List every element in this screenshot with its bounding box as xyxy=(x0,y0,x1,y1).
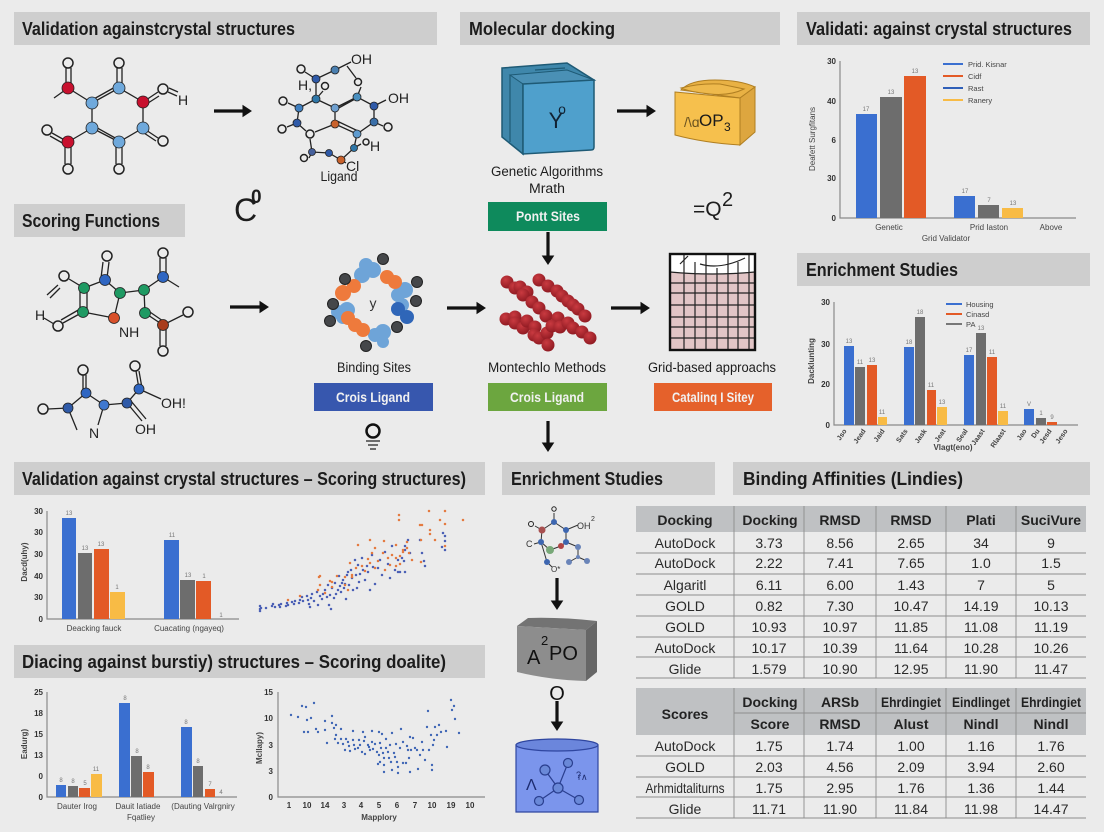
heading: validation scoring structures: Validation against crystal structures – Scoring structures) xyxy=(22,469,466,489)
chart: enrichment bar chart: Cinasd xyxy=(966,310,989,319)
table body rows: 11.08 xyxy=(964,619,998,635)
icon: binding site ring xyxy=(324,254,422,352)
label: genetic algorithms: Genetic Algorithms xyxy=(491,164,603,179)
chart: enrichment bar chart: 11 xyxy=(1000,404,1007,410)
chart: validation bar chart: Cuacating (ngayeq) xyxy=(154,624,224,633)
chart: enrichment bar chart: 9 xyxy=(1050,415,1054,421)
chart: validation bar chart: 30 xyxy=(34,593,44,602)
chart: docking bar chart: 0 xyxy=(39,772,44,781)
icon: molecule hexagon with red atoms xyxy=(42,58,188,174)
scores header: Nindl xyxy=(1034,716,1068,732)
chart: enrichment bar chart: Jao xyxy=(1016,428,1029,442)
button: crois ligand blue xyxy=(314,383,433,411)
heading: docking scoring: Diacing against burstiy) structures – Scoring doalite) xyxy=(22,652,446,672)
scores rows: 1.76 xyxy=(1037,738,1065,754)
chart: enrichment bar chart: Rlaast xyxy=(990,428,1008,449)
scores rows: Arhmidtaliturns xyxy=(646,780,724,796)
table body rows: 7 xyxy=(977,577,985,593)
chart: validation bar chart: 1 xyxy=(219,613,223,619)
table body rows: 1.579 xyxy=(751,661,787,677)
chart: enrichment bar chart: Jso xyxy=(836,428,849,442)
chart: enrichment bar chart: 13 xyxy=(978,326,985,332)
scores rows: 1.76 xyxy=(897,780,925,796)
scores rows: 1.74 xyxy=(826,738,854,754)
heading: binding affinities: Binding Affinities (Lindies) xyxy=(743,469,963,489)
arrow xyxy=(617,109,647,113)
chart: enrichment bar chart: Jesd xyxy=(1039,428,1054,445)
chart: enrichment bar chart: Jeat xyxy=(934,428,948,444)
icon: enrichment molecule: OH xyxy=(577,521,590,531)
chart: enrichment bar chart: 0 xyxy=(826,421,831,430)
label: montechlo methods: Montechlo Methods xyxy=(488,360,606,375)
icon: grey box xyxy=(517,618,597,681)
chart: enrichment bar chart: PA xyxy=(966,320,975,329)
table body rows: 6.11 xyxy=(756,577,782,593)
chart: enrichment bar chart: Jaid xyxy=(873,428,887,444)
arrow xyxy=(447,306,477,310)
chart: scatter mapping: Mcllapy) xyxy=(255,732,264,764)
icon: scoring molecule blue: OH! xyxy=(161,395,186,411)
scores rows xyxy=(646,738,1069,817)
chart: scatter mapping: 3 xyxy=(269,767,274,776)
chart: docking bar chart xyxy=(20,688,237,822)
chart: scatter mapping: 0 xyxy=(269,793,274,802)
chart: enrichment bar chart: Jeso xyxy=(1055,428,1070,445)
chart: top right bar chart xyxy=(808,57,1076,243)
chart: validation bar chart: 13 xyxy=(98,542,105,548)
chart: top right bar chart: 13 xyxy=(1010,201,1017,207)
icon: bulb glyph xyxy=(366,424,380,449)
icon: red molecule chains xyxy=(500,274,596,352)
chart: scatter mapping: 14 xyxy=(321,801,330,810)
chart: docking bar chart: 11 xyxy=(93,767,100,773)
scores rows: 1.75 xyxy=(755,780,783,796)
icon: yellow box xyxy=(675,80,755,145)
chart: enrichment bar chart: 11 xyxy=(857,360,864,366)
icon: ligand molecule: OH xyxy=(388,90,409,106)
chart: docking bar chart: 7 xyxy=(208,782,212,788)
table body rows: 10.97 xyxy=(822,619,858,635)
chart: validation bar chart: Deacking fauck xyxy=(67,624,122,633)
table body rows: 1.0 xyxy=(971,555,991,571)
chart: scatter mapping: Mapplory xyxy=(361,813,397,822)
arrow xyxy=(555,701,559,722)
scores rows: 1.00 xyxy=(897,738,925,754)
icon: enrichment molecule: O* xyxy=(551,565,560,574)
heading: molecular docking: Molecular docking xyxy=(469,19,615,39)
chart: scatter mapping: 3 xyxy=(269,741,274,750)
heading: enrichment studies center: Enrichment Studies xyxy=(511,469,663,489)
icon: ligand molecule: Cl xyxy=(346,158,359,174)
chart: scatter mapping: 7 xyxy=(413,801,418,810)
chart: docking bar chart: Eadurg) xyxy=(20,729,29,759)
chart: docking bar chart: 5 xyxy=(83,781,87,787)
table body rows: 9 xyxy=(1047,535,1055,551)
chart: enrichment bar chart: 13 xyxy=(939,400,946,406)
chart: top right bar chart: Prid Iaston xyxy=(970,223,1008,232)
table body rows: 7.30 xyxy=(826,598,854,614)
chart: scatter mapping xyxy=(255,688,485,822)
button: crois ligand green: Crois Ligand xyxy=(510,390,584,405)
table body rows: 10.26 xyxy=(1033,640,1069,656)
chart: enrichment bar chart: Housing xyxy=(966,300,994,309)
chart: docking bar chart: 8 xyxy=(146,765,150,771)
scores rows: 11.84 xyxy=(894,801,928,817)
chart: enrichment bar chart: 11 xyxy=(989,350,996,356)
chart: docking bar chart: 0 xyxy=(39,793,44,802)
chart: validation bar chart: 30 xyxy=(34,528,44,537)
chart: validation bar chart: 40 xyxy=(34,572,44,581)
chart: top right bar chart: 40 xyxy=(827,97,837,106)
chart: docking bar chart: (Dauting Valrgniry xyxy=(171,802,235,811)
chart: top right bar chart: Grid Validator xyxy=(922,234,970,243)
chart: enrichment bar chart: 1 xyxy=(1039,411,1043,417)
table: docking values xyxy=(636,506,1086,678)
arrow xyxy=(546,232,550,256)
icon: yellow box: OP xyxy=(699,111,724,130)
scores rows: Glide xyxy=(669,801,702,817)
icon: yellow box: /\ɑ' xyxy=(684,114,702,130)
chart: top right bar chart: Above xyxy=(1040,223,1063,232)
scores header xyxy=(662,694,1081,732)
scores rows: 11.71 xyxy=(752,801,786,817)
chart: docking bar chart: 15 xyxy=(34,730,44,739)
button: crois ligand green xyxy=(488,383,607,411)
chart: scatter mapping: 5 xyxy=(377,801,382,810)
table body rows: AutoDock xyxy=(655,555,716,571)
table body rows: GOLD xyxy=(665,619,705,635)
icon: molecule hexagon with red atoms: H xyxy=(178,92,188,108)
chart: scatter blue and orange xyxy=(260,511,463,611)
chart: enrichment bar chart: 13 xyxy=(869,358,876,364)
chart: validation bar chart: 30 xyxy=(34,507,44,516)
chart: enrichment bar chart: 13 xyxy=(846,339,853,345)
chart: top right bar chart: Prid. Kisnar xyxy=(968,60,1007,69)
chart: enrichment bar chart: Du xyxy=(1031,428,1042,440)
chart: enrichment bar chart: Sats xyxy=(895,428,910,444)
scores rows: AutoDock xyxy=(655,738,716,754)
chart: enrichment bar chart: 11 xyxy=(879,410,886,416)
chart: top right bar chart: 30 xyxy=(827,57,837,66)
table body rows: 10.47 xyxy=(893,598,929,614)
chart: scatter mapping: 10 xyxy=(303,801,312,810)
chart: top right bar chart: 6 xyxy=(832,136,837,145)
chart: enrichment bar chart: 11 xyxy=(928,383,935,389)
chart: docking bar chart: Dauit Iatiade xyxy=(116,802,161,811)
chart: enrichment bar chart: 30 xyxy=(821,340,831,349)
arrow xyxy=(214,109,243,113)
chart: docking bar chart: 18 xyxy=(34,709,44,718)
table body rows: 10.13 xyxy=(1033,598,1069,614)
chart: enrichment bar chart: Jaast xyxy=(971,428,987,447)
scores header: Ehrdingiet xyxy=(1021,694,1081,710)
formula: equals Q squared: 2 xyxy=(722,189,733,211)
heading: validation against crystal structures xyxy=(14,12,437,45)
chart: scatter mapping: 1 xyxy=(287,801,292,810)
chart: top right bar chart: Ranery xyxy=(968,96,992,105)
table body rows: 11.90 xyxy=(964,661,998,677)
heading: scoring functions xyxy=(14,204,185,237)
heading: molecular docking xyxy=(460,12,780,45)
chart: top right bar chart: 0 xyxy=(832,214,837,223)
icon: blue cylinder with molecule xyxy=(516,739,598,812)
table body rows xyxy=(655,535,1069,677)
icon: blue cube: o xyxy=(558,101,566,117)
icon: enrichment molecule: 2 xyxy=(591,516,595,523)
heading: validation scoring structures xyxy=(14,462,485,495)
scores rows: 1.36 xyxy=(967,780,995,796)
chart: enrichment bar chart: V xyxy=(1027,402,1031,408)
icon: ligand molecule: H xyxy=(370,138,380,154)
label: genetic algorithms xyxy=(491,164,603,196)
chart: validation bar chart: Dacd(uhy) xyxy=(20,542,29,582)
heading: scoring functions: Scoring Functions xyxy=(22,211,160,231)
icon: ligand molecule: Ligand xyxy=(320,168,358,184)
arrow xyxy=(546,421,550,443)
icon: blue cube xyxy=(502,63,594,154)
chart: top right bar chart: 13 xyxy=(912,69,919,75)
icon: yellow box: 3 xyxy=(724,120,731,134)
chart: enrichment bar chart: Seal xyxy=(956,428,970,444)
scores rows: 2.60 xyxy=(1037,759,1065,775)
table: scores xyxy=(636,688,1086,818)
label: genetic algorithms: Mrath xyxy=(529,181,565,196)
scores rows: GOLD xyxy=(665,759,705,775)
chart: enrichment bar chart: 30 xyxy=(821,298,831,307)
chart: validation bar chart: 11 xyxy=(169,533,176,539)
table body rows: 5 xyxy=(1047,577,1055,593)
formula: equals Q squared xyxy=(693,189,733,221)
scores rows: 3.94 xyxy=(967,759,995,775)
chart: validation bar chart: 1 xyxy=(115,585,119,591)
chart: docking bar chart: Dauter Irog xyxy=(57,802,97,811)
scores rows: 1.44 xyxy=(1037,780,1065,796)
table header row xyxy=(657,512,1081,528)
heading: validation against crystal structures: Validation againstcrystal structures xyxy=(22,19,295,39)
chart: enrichment bar chart: Dacklunting xyxy=(807,338,816,384)
button: pontt sites xyxy=(488,202,607,231)
table header row: Docking xyxy=(742,512,798,528)
chart: validation bar chart: 13 xyxy=(185,573,192,579)
scores header: Ehrdingiet xyxy=(881,694,941,710)
scores header: RMSD xyxy=(819,716,861,732)
scores rows: 11.98 xyxy=(964,801,998,817)
icon: binding site ring: y xyxy=(370,295,376,311)
chart: top right bar chart: Rast xyxy=(968,84,984,93)
chart: scatter mapping: 3 xyxy=(342,801,347,810)
button: crois ligand blue: Crois Ligand xyxy=(336,390,410,405)
chart: docking bar chart: 4 xyxy=(219,790,223,796)
button: catalinq sitey orange xyxy=(654,383,772,411)
chart: enrichment bar chart: Jask xyxy=(914,428,929,445)
label: binding sites: Binding Sites xyxy=(337,360,411,375)
chart: docking bar chart: Fqatliey xyxy=(127,813,155,822)
table body rows: 6.00 xyxy=(826,577,854,593)
button: pontt sites: Pontt Sites xyxy=(516,209,580,224)
chart: enrichment bar chart: 17 xyxy=(966,348,973,354)
table body rows: 11.47 xyxy=(1034,661,1068,677)
icon: scoring molecule green xyxy=(35,248,193,356)
formula: C superscript 0: 0 xyxy=(251,187,262,208)
heading: binding affinities xyxy=(733,462,1090,495)
table header row: Plati xyxy=(966,512,996,528)
icon: enrichment molecule xyxy=(526,507,595,574)
heading: enrichment studies center xyxy=(502,462,715,495)
table body rows: GOLD xyxy=(665,598,705,614)
chart: docking bar chart: 8 xyxy=(184,720,188,726)
formula: equals Q squared: =Q xyxy=(693,198,722,221)
table header row: RMSD xyxy=(819,512,861,528)
chart: docking bar chart: 8 xyxy=(123,696,127,702)
chart: scatter mapping: 10 xyxy=(466,801,475,810)
chart: validation bar chart: 13 xyxy=(82,546,89,552)
icon: scoring molecule blue: OH xyxy=(135,421,156,437)
chart: enrichment bar chart: 18 xyxy=(906,340,913,346)
icon: grid cylinder xyxy=(670,254,755,350)
table body rows: 3.73 xyxy=(755,535,783,551)
heading: validate against crystal structures xyxy=(797,12,1090,45)
chart: top right bar chart: 13 xyxy=(888,90,895,96)
icon: ligand molecule: H, xyxy=(298,77,312,93)
table header row: RMSD xyxy=(890,512,932,528)
table body rows: 10.39 xyxy=(822,640,858,656)
chart: top right bar chart: 17 xyxy=(962,189,969,195)
icon: ligand molecule: OH xyxy=(351,51,372,67)
scores rows: 1.16 xyxy=(967,738,995,754)
chart: validation bar chart: 13 xyxy=(66,511,73,517)
table body rows: AutoDock xyxy=(655,535,716,551)
table header row: SuciVure xyxy=(1021,512,1081,528)
table body rows: 10.90 xyxy=(822,661,858,677)
chart: enrichment bar chart: 20 xyxy=(821,380,831,389)
chart: top right bar chart: Genetic xyxy=(875,223,903,232)
scores header: Alust xyxy=(894,716,929,732)
icon: blue cylinder with molecule: ? xyxy=(576,770,581,780)
button: catalinq sitey orange: Catalinq I Sitey xyxy=(672,390,754,405)
arrow xyxy=(611,306,641,310)
arrow xyxy=(555,578,559,601)
table body rows: Algaritl xyxy=(664,577,706,593)
icon: enrichment molecule: C xyxy=(526,539,533,549)
scores rows: 2.03 xyxy=(755,759,783,775)
heading: validate against crystal structures: Validati: against crystal structures xyxy=(806,19,1072,39)
chart: top right bar chart: Cidf xyxy=(968,72,982,81)
table body rows: AutoDock xyxy=(655,640,716,656)
chart: scatter mapping: 10 xyxy=(264,714,274,723)
table body rows: 34 xyxy=(973,535,989,551)
table body rows: 14.19 xyxy=(963,598,999,614)
scores rows: 1.75 xyxy=(755,738,783,754)
chart: docking bar chart: 8 xyxy=(135,749,139,755)
chart: enrichment bar chart: Vlagt(eno) xyxy=(933,443,973,452)
chart: docking bar chart: 8 xyxy=(196,759,200,765)
icon: scoring molecule blue xyxy=(38,361,186,441)
chart: scatter mapping: 15 xyxy=(264,688,274,697)
chart: validation bar chart xyxy=(20,507,239,633)
scores header: Score xyxy=(751,716,790,732)
table body rows: 8.56 xyxy=(826,535,854,551)
icon: scoring molecule blue: N xyxy=(89,425,99,441)
label: grid-based approachs: Grid-based approachs xyxy=(648,360,776,375)
scores rows: 2.95 xyxy=(826,780,854,796)
table body rows: 11.85 xyxy=(894,619,928,635)
icon: grey box: A xyxy=(527,647,541,669)
chart: validation bar chart: 30 xyxy=(34,550,44,559)
icon: scoring molecule green: H xyxy=(35,307,45,323)
chart: scatter mapping: 4 xyxy=(359,801,364,810)
scores rows: 14.47 xyxy=(1033,801,1069,817)
table body rows: Glide xyxy=(669,661,702,677)
scores header: Eindlinget xyxy=(952,694,1010,710)
scores header: Scores xyxy=(662,706,709,722)
table body rows: 0.82 xyxy=(755,598,783,614)
chart: docking bar chart: 13 xyxy=(34,751,44,760)
chart: top right bar chart: 30 xyxy=(827,174,837,183)
table body rows: 11.64 xyxy=(894,640,928,656)
icon: scoring molecule green: NH xyxy=(119,324,139,340)
icon: blue cube: Y xyxy=(549,108,564,133)
chart: validation bar chart: 1 xyxy=(202,574,206,580)
chart: scatter mapping: 10 xyxy=(428,801,437,810)
chart: docking bar chart: 8 xyxy=(59,778,63,784)
chart: docking bar chart: 25 xyxy=(34,688,44,697)
table body rows: 2.65 xyxy=(897,535,925,551)
table body rows: 1.43 xyxy=(897,577,925,593)
scores header: Nindl xyxy=(964,716,998,732)
scores rows: 4.56 xyxy=(826,759,854,775)
scores header: ARSb xyxy=(821,694,859,710)
table body rows: 10.17 xyxy=(751,640,787,656)
table body rows: 7.65 xyxy=(897,555,925,571)
chart: enrichment bar chart: Jead xyxy=(853,428,868,445)
table header row: Docking xyxy=(657,512,713,528)
table body rows: 12.95 xyxy=(893,661,929,677)
scores rows: 11.90 xyxy=(823,801,857,817)
heading: docking scoring xyxy=(14,645,485,678)
chart: top right bar chart: 7 xyxy=(987,198,991,204)
heading: enrichment studies right xyxy=(797,253,1090,286)
table body rows: 1.5 xyxy=(1041,555,1061,571)
icon: ligand molecule xyxy=(278,51,409,184)
chart: docking bar chart: 8 xyxy=(71,779,75,785)
table body rows: 10.93 xyxy=(751,619,787,635)
scores header: Docking xyxy=(742,694,798,710)
icon: grey box: PO xyxy=(549,643,578,665)
icon: blue cylinder with molecule: r∧ xyxy=(578,772,588,782)
chart: scatter mapping: 19 xyxy=(447,801,456,810)
table body rows: 10.28 xyxy=(963,640,999,656)
chart: enrichment bar chart xyxy=(807,298,1078,452)
formula: C superscript 0: C xyxy=(234,192,257,228)
chart: top right bar chart: 17 xyxy=(863,107,870,113)
scores rows: 2.09 xyxy=(897,759,925,775)
table body rows: 7.41 xyxy=(826,555,854,571)
icon: blue cylinder with molecule: Λ xyxy=(526,777,537,794)
chart: validation bar chart: 0 xyxy=(39,615,44,624)
table body rows: 11.19 xyxy=(1034,619,1068,635)
chart: top right bar chart: Deafett Surgfitans xyxy=(808,107,817,171)
chart: scatter mapping: 6 xyxy=(395,801,400,810)
chart: enrichment bar chart: 18 xyxy=(917,310,924,316)
arrow xyxy=(230,305,260,309)
label: O glyph: O xyxy=(549,683,565,705)
table body rows: 2.22 xyxy=(755,555,783,571)
icon: grey box: 2 xyxy=(541,633,548,648)
heading: enrichment studies right: Enrichment Studies xyxy=(806,260,958,280)
